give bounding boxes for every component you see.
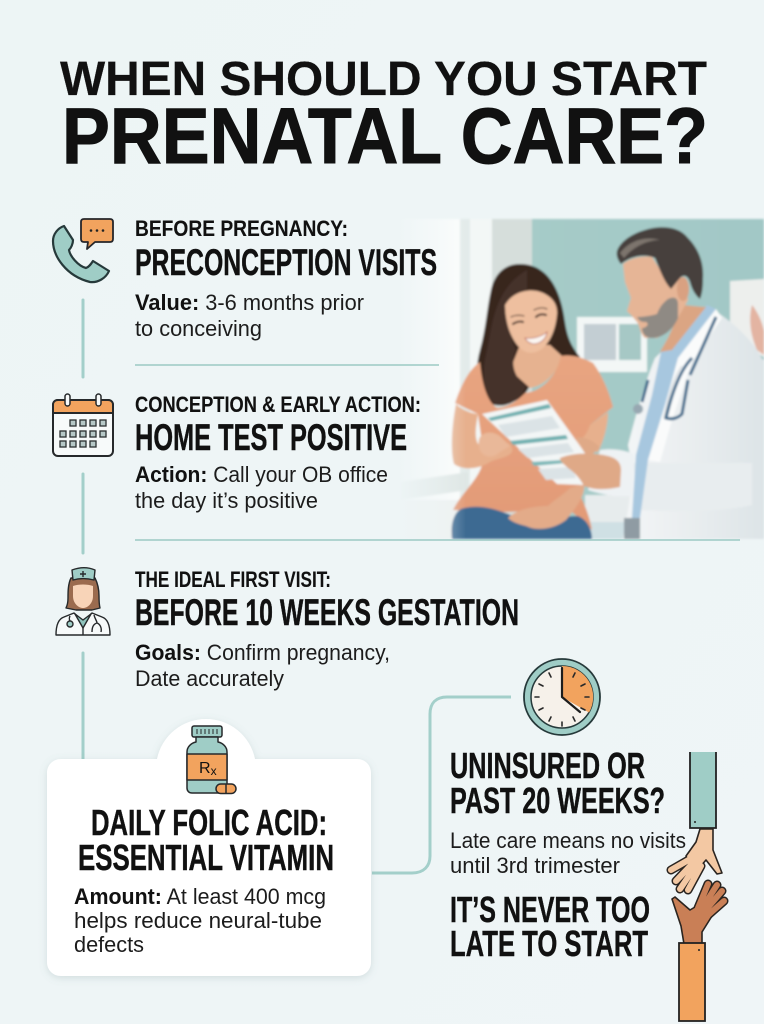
- lower hand: [672, 884, 724, 944]
- card text: Amount: At least 400 mcg: [74, 884, 326, 909]
- card text: [74, 802, 334, 957]
- icon: nurse: [56, 568, 110, 635]
- step 2 text: home test positive: Action: Call your OB office: [135, 462, 388, 487]
- woman jeans: [452, 507, 592, 539]
- panel: daily folic acid card: [47, 719, 371, 976]
- doctor beard: [637, 298, 678, 338]
- left fade: [396, 215, 466, 545]
- doctor face: [623, 257, 688, 338]
- step 3 text: before 10 weeks gestation: THE IDEAL FIRST VISIT:: [135, 567, 331, 592]
- step 2 text: home test positive: HOME TEST POSITIVE: [135, 417, 407, 458]
- icon: clock: [524, 659, 600, 735]
- title: PRENATAL CARE?: [62, 91, 708, 180]
- window sill and bed: [400, 472, 468, 500]
- doctor coat: [623, 308, 764, 539]
- step 2 text: home test positive: CONCEPTION & EARLY ACTION:: [135, 392, 421, 417]
- upper sleeve: [690, 752, 716, 828]
- icon: pill bottle: [187, 726, 236, 794]
- icon: pill bottle: R: [199, 760, 211, 777]
- late care text: Late care means no visits: [450, 828, 686, 853]
- step 1 text: preconception visits: to conceiving: [135, 316, 262, 341]
- wall shelf: [577, 317, 647, 372]
- paper: [482, 400, 585, 485]
- late care text: [450, 745, 686, 964]
- step 3 text: before 10 weeks gestation: Goals: Confirm pregnancy,: [135, 640, 390, 665]
- step 2 text: home test positive: the day it’s positive: [135, 488, 318, 513]
- icon: phone with speech bubble: [53, 219, 113, 282]
- title: [60, 53, 708, 180]
- woman hair front: [484, 270, 527, 406]
- card text: defects: [74, 932, 144, 957]
- late care text: UNINSURED OR: [450, 745, 645, 786]
- late care text: LATE TO START: [450, 923, 648, 964]
- photo: patient and doctor reviewing a document: [396, 215, 764, 545]
- step 1 text: preconception visits: [135, 216, 437, 341]
- step 3 text: before 10 weeks gestation: Date accurately: [135, 666, 284, 691]
- step 3 text: before 10 weeks gestation: BEFORE 10 WEEKS GESTATION: [135, 592, 519, 633]
- doctor ear: [677, 277, 689, 301]
- woman hand on paper: [479, 433, 510, 456]
- icon: pill bottle: x: [211, 764, 217, 778]
- late care text: until 3rd trimester: [450, 853, 620, 878]
- doctor pants shadow: [624, 518, 640, 539]
- coat sleeve crease: [633, 463, 752, 511]
- late care text: PAST 20 WEEKS?: [450, 780, 665, 821]
- timeline connectors: [82, 300, 84, 762]
- divider lines: [135, 365, 740, 540]
- woman face: [505, 291, 557, 353]
- title: WHEN SHOULD YOU START: [60, 53, 707, 106]
- doctor neck: [660, 305, 706, 352]
- step 2 text: home test positive: [135, 392, 421, 513]
- doctor hand: [560, 454, 621, 489]
- doctor shirt: [632, 305, 716, 518]
- connector from card to clock: [372, 697, 511, 873]
- woman clasped hands: [508, 484, 584, 529]
- woman right arm: [576, 412, 608, 452]
- woman hair back: [477, 264, 580, 405]
- doctor lapel: [648, 309, 722, 462]
- doctor upper fingers: [576, 437, 600, 456]
- woman shirt: [453, 355, 613, 530]
- doctor hair: [617, 227, 703, 299]
- upper hand: [671, 829, 722, 890]
- lower sleeve: [679, 943, 705, 1021]
- woman eyes and smile: [511, 308, 547, 324]
- card text: DAILY FOLIC ACID:: [91, 802, 327, 843]
- step 3 text: before 10 weeks gestation: [135, 567, 519, 691]
- stethoscope: [642, 317, 716, 419]
- step 1 text: preconception visits: PRECONCEPTION VISITS: [135, 242, 437, 283]
- woman neck and chest: [510, 345, 562, 388]
- icon: calendar: [53, 394, 113, 456]
- step 1 text: preconception visits: BEFORE PREGNANCY:: [135, 216, 348, 241]
- icon: reaching hands: [671, 752, 724, 1021]
- woman left arm: [452, 404, 512, 468]
- card text: helps reduce neural-tube: [74, 908, 322, 933]
- doctor cuff: [588, 449, 634, 497]
- late care text: IT’S NEVER TOO: [450, 889, 650, 930]
- card text: ESSENTIAL VITAMIN: [78, 837, 334, 878]
- step 1 text: preconception visits: Value: 3-6 months prior: [135, 290, 364, 315]
- wall poster: [730, 279, 764, 357]
